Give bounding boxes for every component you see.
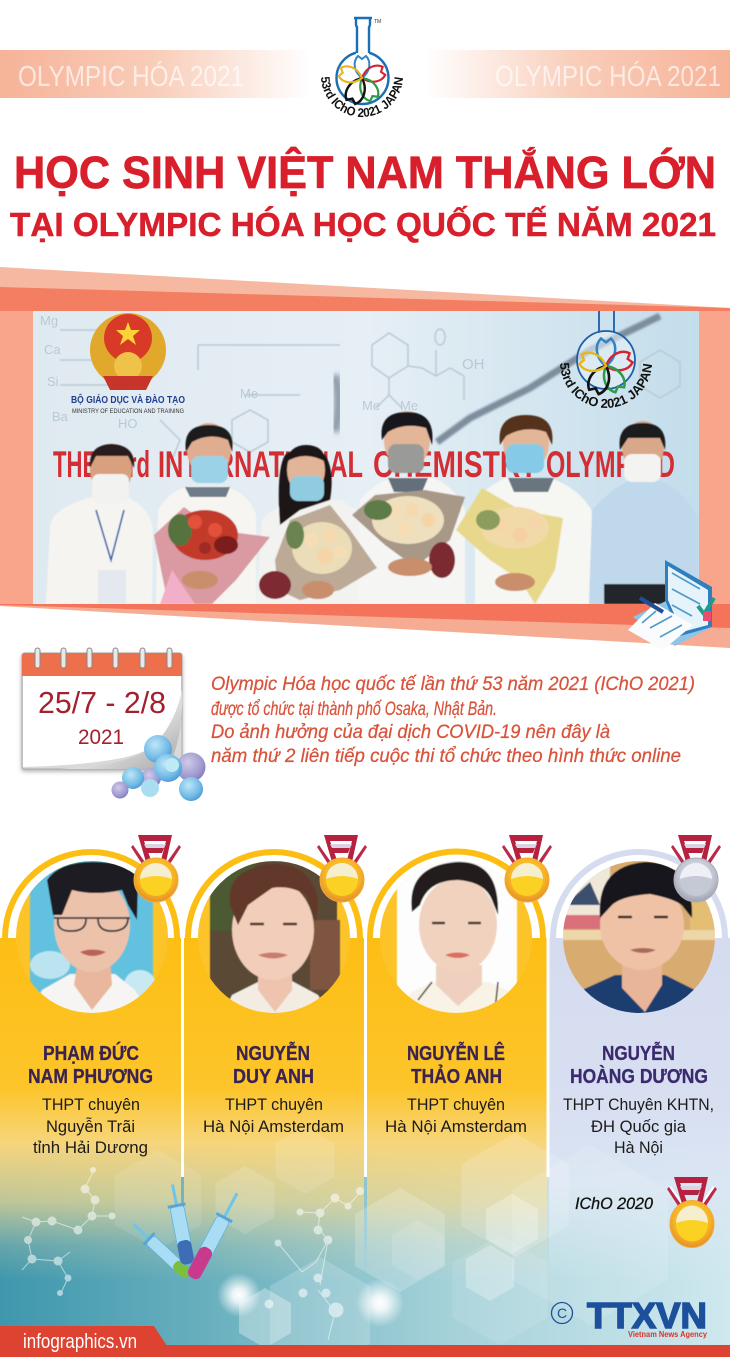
person 3 — [256, 444, 360, 604]
student 1 text: tỉnh Hải Dương — [33, 1138, 148, 1157]
year: 2021 — [78, 726, 124, 749]
backdrop: periodic labels — [40, 313, 484, 431]
top slanted ribbon — [0, 267, 730, 312]
student 1 text: PHẠM ĐỨC — [43, 1041, 139, 1065]
backdrop: periodic labels: Si — [47, 374, 59, 389]
calendar — [22, 648, 182, 769]
backdrop: IChO logo — [560, 311, 652, 408]
copyright mark: C — [557, 1305, 567, 1321]
medal: IChO 2020 gold — [667, 1177, 717, 1248]
portrait 4 — [560, 861, 720, 1016]
person 5 — [475, 415, 596, 604]
card dividers — [181, 938, 550, 1177]
student 4 text: THPT Chuyên KHTN, — [563, 1095, 714, 1114]
IChO 2020 label: IChO 2020 — [575, 1194, 654, 1213]
TTXVN logo: Vietnam News Agency — [628, 1330, 708, 1339]
molecule networks — [22, 1168, 364, 1340]
header band left — [0, 50, 310, 98]
student 2 text: THPT chuyên — [225, 1095, 323, 1114]
card 3 body — [367, 938, 547, 1280]
icon: molecule balls — [112, 735, 206, 801]
student 2 text: NGUYỄN — [236, 1042, 310, 1065]
student 3 text: Hà Nội Amsterdam — [385, 1117, 527, 1136]
card 2 body — [184, 938, 364, 1280]
medal: Thảo Anh — [502, 835, 552, 902]
student 1 text: NAM PHƯƠNG — [28, 1066, 153, 1088]
icon: IChO flask logo: 53rd IChO 2021 JAPAN — [321, 77, 403, 118]
person 4 — [358, 411, 465, 604]
medal: Nam Phương — [131, 835, 181, 902]
backdrop: banner heading: INTERNATIONAL — [158, 444, 363, 485]
student 3 text: THPT chuyên — [407, 1095, 505, 1114]
backdrop: ministry emblem: MINISTRY OF EDUCATION AND TRAINING — [72, 408, 184, 415]
student 3 text: THẢO ANH — [411, 1065, 502, 1088]
backdrop: periodic labels: Me — [362, 398, 380, 413]
icon: laptop checklist — [628, 560, 714, 650]
card 2 arch — [185, 849, 363, 1013]
backdrop: periodic labels: Me — [240, 386, 258, 401]
title — [10, 147, 716, 243]
backdrop: periodic labels: Ca — [44, 342, 61, 357]
bouquet 2 — [259, 505, 377, 600]
backdrop: periodic labels: OH — [462, 356, 484, 373]
calendar rings — [35, 648, 172, 668]
portrait 3 — [397, 861, 517, 1016]
backdrop: banner heading — [53, 450, 674, 478]
TTXVN logo: TTXVN — [587, 1295, 707, 1336]
calendar page — [23, 670, 181, 767]
bouquet 4 — [456, 488, 563, 604]
medal: Hoàng Dương silver — [671, 835, 721, 902]
student 4 text: NGUYỄN — [602, 1042, 675, 1065]
student 3 text: NGUYỄN LÊ — [407, 1041, 505, 1065]
intro text: được tổ chức tại thành phố Osaka, Nhật Bản. — [211, 699, 497, 720]
intro text: năm thứ 2 liên tiếp cuộc thi tổ chức theo hình thức online — [211, 746, 681, 767]
backdrop: periodic labels: Me — [400, 398, 418, 413]
title: HỌC SINH VIỆT NAM THẮNG LỚN — [14, 147, 716, 198]
student 4 text: HOÀNG DƯƠNG — [570, 1065, 708, 1088]
backdrop: banner heading: THE 53rd — [53, 444, 150, 485]
tube middle — [164, 1183, 197, 1266]
people — [46, 411, 698, 604]
date: 25/7 - 2/8 — [38, 685, 166, 720]
student 2 text: DUY ANH — [233, 1066, 314, 1088]
footer bar: infographics.vn — [23, 1331, 137, 1353]
person 1 — [46, 444, 153, 604]
header band left: OLYMPIC HÓA 2021 — [18, 60, 244, 93]
icon: test tubes — [128, 1183, 245, 1282]
bouquet 3 — [352, 490, 465, 578]
student 2 text — [203, 1042, 344, 1136]
backdrop: periodic labels: Ba — [52, 409, 69, 424]
portrait 1 — [30, 861, 156, 1016]
bouquet 1 — [154, 507, 270, 604]
person 6 — [588, 420, 666, 604]
intro text: Olympic Hóa học quốc tế lần thứ 53 năm 2021 (IChO 2021) — [211, 674, 695, 695]
card 3 arch — [367, 849, 546, 1013]
backdrop: banner heading: CHEMISTRY — [373, 444, 538, 485]
student 1 text: Nguyễn Trãi — [46, 1117, 135, 1136]
student 1 text: THPT chuyên — [42, 1095, 140, 1114]
card 4 body — [549, 938, 730, 1280]
bottom background — [0, 938, 730, 1357]
icon: IChO flask logo: TM — [374, 19, 381, 25]
icon: IChO flask logo — [321, 16, 403, 118]
backdrop: ministry emblem — [71, 313, 185, 415]
person 2 — [156, 423, 256, 604]
tube right — [184, 1189, 245, 1282]
card 4 arch — [550, 849, 728, 1013]
medal: Duy Anh — [317, 835, 367, 902]
card 1 body — [0, 938, 181, 1280]
backdrop: periodic labels: Mg — [40, 313, 58, 328]
backdrop: periodic labels: HO — [118, 416, 138, 431]
hands — [182, 571, 218, 589]
bottom slanted ribbon — [0, 604, 730, 648]
student 4 text: ĐH Quốc gia — [591, 1117, 687, 1136]
student 4 text: Hà Nội — [614, 1138, 663, 1157]
intro text: Do ảnh hưởng của đại dịch COVID-19 nên đây là — [211, 722, 610, 743]
intro text — [211, 674, 695, 767]
tube left — [128, 1218, 194, 1282]
backdrop: chemistry drawing — [60, 329, 680, 470]
glowing lights — [217, 1273, 404, 1327]
calendar shadow — [22, 653, 182, 769]
backdrop: ministry emblem: BỘ GIÁO DỤC VÀ ĐÀO TẠO — [71, 393, 185, 406]
calendar header — [22, 653, 182, 676]
footer bar — [0, 1326, 730, 1357]
card 1 arch — [2, 849, 180, 1013]
portrait 2 — [210, 861, 340, 1016]
calendar page curl — [60, 690, 182, 769]
student 1 text — [28, 1041, 153, 1157]
backdrop: IChO logo: 53rd IChO 2021 JAPAN — [560, 363, 652, 408]
group photo — [33, 311, 699, 604]
title: TẠI OLYMPIC HÓA HỌC QUỐC TẾ NĂM 2021 — [10, 205, 716, 243]
header band right — [425, 50, 730, 98]
student 2 text: Hà Nội Amsterdam — [203, 1117, 344, 1136]
student 3 text — [385, 1041, 527, 1136]
hexagon background pattern — [115, 1126, 668, 1357]
photo side panels — [0, 311, 730, 605]
copyright mark — [552, 1302, 572, 1324]
student 4 text — [563, 1042, 714, 1157]
backdrop: dark diagonal streak — [437, 316, 660, 442]
